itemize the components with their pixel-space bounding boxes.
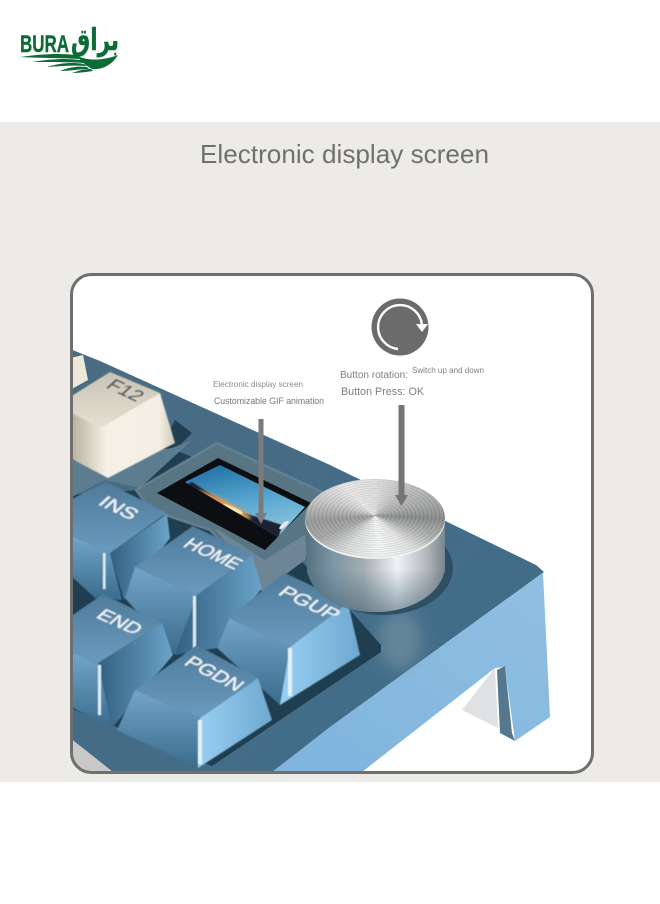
label: F12: F12 (101, 376, 149, 405)
logo (20, 23, 119, 73)
bezel lower wall (215, 528, 312, 592)
knob top face (305, 479, 445, 559)
top plate (70, 349, 544, 772)
knob (305, 479, 453, 615)
logo text: Arabic: براق (71, 23, 119, 58)
key recess (70, 420, 381, 766)
screen bezel (136, 443, 322, 592)
title: Electronic display screen (200, 139, 489, 169)
icon: rotation (372, 298, 428, 356)
label: INS: INS (93, 493, 144, 524)
label: PGDN: PGDN (179, 653, 249, 695)
label: electronic display screen: Electronic display screen (213, 379, 303, 389)
knob rim (305, 516, 445, 559)
knob cylinder (305, 518, 445, 612)
arrow: to knob (395, 405, 408, 506)
logo wing (20, 54, 118, 73)
label: HOME: HOME (178, 535, 247, 573)
screen image (185, 465, 305, 537)
card border (72, 274, 592, 772)
key: HOME (125, 526, 262, 655)
plate strip under F12 (70, 440, 192, 498)
keyboard photo (70, 349, 550, 772)
base shadow shapes (462, 668, 498, 728)
label: button press: Button Press: OK (341, 386, 425, 398)
label: customizable GIF animation: Customizable GIF animation (214, 396, 324, 407)
key: INS (70, 482, 170, 600)
key: PGUP (217, 573, 360, 705)
card: keyboard illustration (70, 274, 592, 772)
background panel (0, 122, 660, 782)
label: PGUP: PGUP (273, 583, 345, 624)
key: END (70, 594, 173, 728)
knob well (345, 546, 453, 615)
key: F12 (70, 372, 175, 478)
label: switch up and down: Switch up and down (412, 365, 484, 375)
blue case side (270, 573, 550, 772)
key: PGDN (117, 645, 272, 768)
screen frame (157, 458, 311, 550)
logo text: BURA: BURA (20, 31, 69, 58)
label: button rotation: Button rotation: (340, 370, 408, 381)
key: top-left cream (73, 355, 88, 388)
label: END: END (91, 606, 147, 638)
plate texture highlight (378, 610, 422, 670)
arrow: to screen (255, 419, 267, 524)
